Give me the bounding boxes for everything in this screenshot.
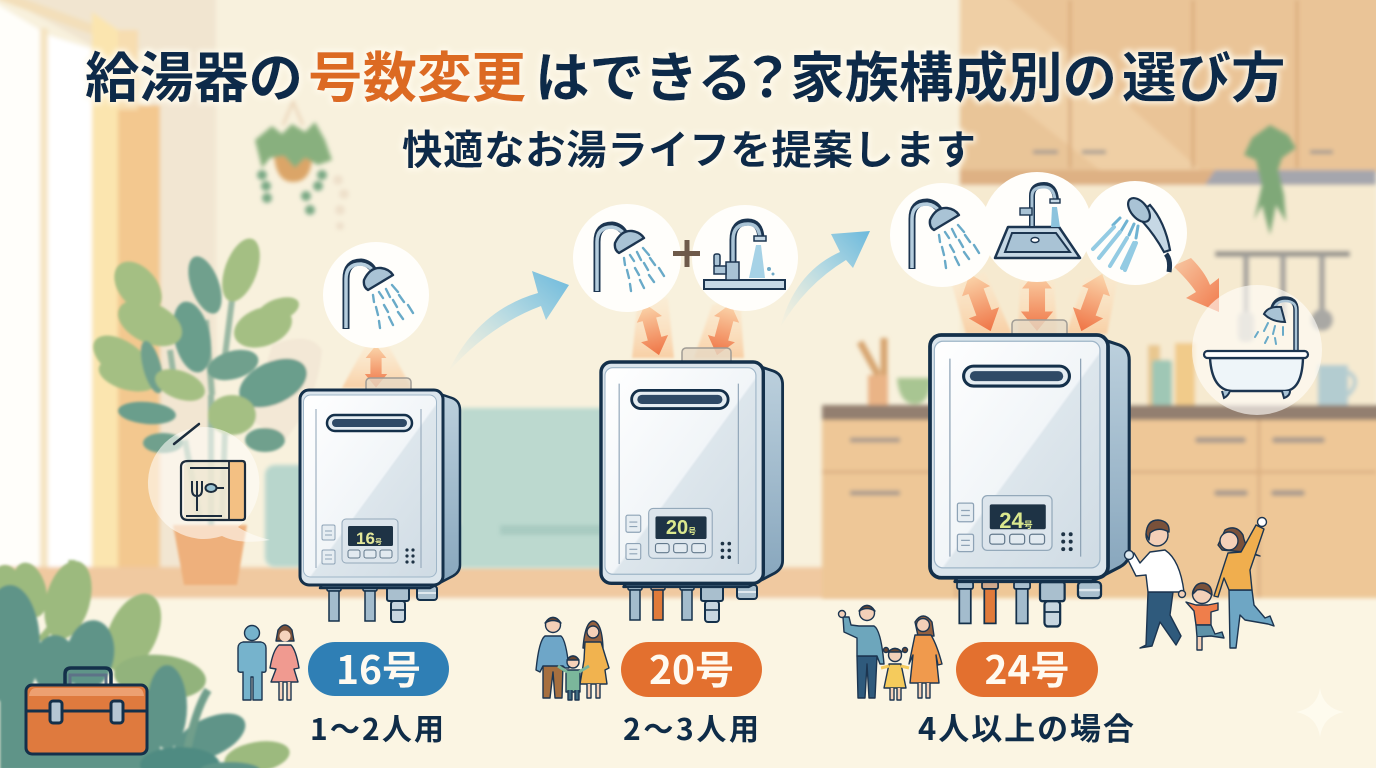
- background: large potted plant: [85, 234, 322, 585]
- display: 24号: [999, 508, 1033, 533]
- icon: faucet circle 20: [692, 205, 798, 311]
- icon: shower circle 20: [573, 204, 681, 312]
- blue flow arrow 1: [448, 271, 569, 372]
- background: hanging plant right: [1244, 125, 1296, 235]
- people: couple: [238, 625, 299, 700]
- sparkle: [1296, 688, 1344, 737]
- water heater 16号: [300, 378, 460, 622]
- title: 家族構成別の: [790, 34, 1117, 113]
- small top bracket: [682, 348, 731, 365]
- toolbox icon: [26, 668, 147, 754]
- label: 2~3 people: 2〜3人用: [623, 705, 759, 749]
- title: はできる: [535, 34, 752, 113]
- label: 1~2 people: 1〜2人用: [310, 705, 444, 749]
- badge: 20号: [621, 640, 762, 697]
- display: 16号: [356, 529, 382, 548]
- icon: bathtub circle: [1192, 285, 1322, 415]
- people: family of three: [536, 618, 609, 700]
- icon: sink circle 24: [982, 172, 1092, 282]
- badge: 24号: [956, 640, 1098, 697]
- water heater 24号: [930, 320, 1129, 626]
- title: 号数変更: [308, 34, 526, 113]
- background: sofa: [265, 408, 610, 568]
- water heater 20号: [601, 348, 783, 622]
- heat exchange: 16: [342, 345, 411, 388]
- icon: hand shower circle 24: [1083, 181, 1187, 285]
- badge: 16号: 16号: [336, 640, 421, 696]
- small top bracket: [366, 378, 411, 394]
- icon: kitchen bubble: [148, 424, 270, 542]
- small top bracket: [1012, 320, 1067, 338]
- blue flow arrow 2: [780, 231, 870, 328]
- badge: 20号: 20号: [649, 640, 734, 696]
- badge: 16号: [308, 640, 449, 696]
- background: hanging plant left: [255, 102, 349, 230]
- display: 20号: [666, 517, 696, 539]
- label: 4 or more: 4人以上の場合: [918, 704, 1134, 749]
- title: 給湯器の: [85, 34, 303, 113]
- plus sign: [673, 240, 700, 267]
- background: foreground leaves bottom-left: [0, 556, 292, 768]
- heat exchange: 20: [632, 298, 744, 359]
- icon: shower circle 16: [323, 242, 429, 348]
- heat exchange: 24: [952, 268, 1118, 337]
- subtitle: 快適なお湯ライフを提案します: [402, 117, 976, 176]
- orange arrow to bath: [1173, 258, 1219, 312]
- badge: 24号: 24号: [984, 640, 1070, 696]
- title: ？: [740, 34, 795, 113]
- title: 選び方: [1122, 34, 1286, 113]
- people: running family: [1124, 518, 1274, 650]
- background: kitchen: [822, 0, 1376, 598]
- icon: shower circle 24: [890, 183, 994, 287]
- people: family waving: [838, 606, 942, 700]
